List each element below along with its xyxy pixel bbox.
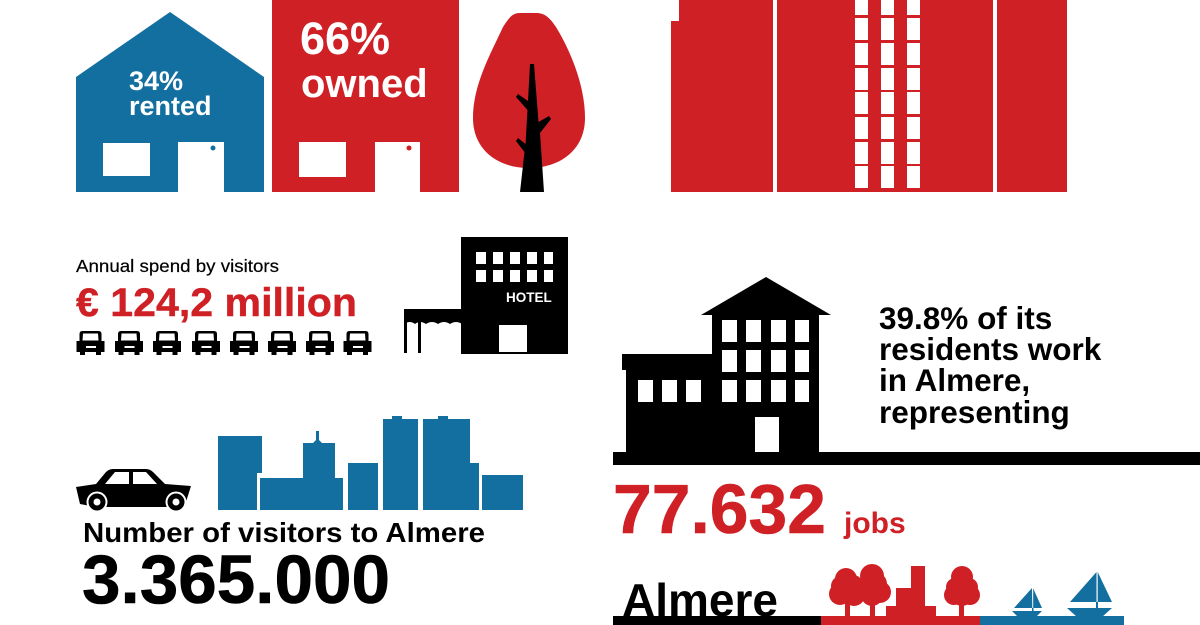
- owned door knob: [406, 146, 412, 150]
- red trees and building: [829, 564, 980, 617]
- row of car icons: [76, 331, 372, 355]
- house window: [103, 143, 150, 176]
- label: 66% owned: owned: [301, 62, 428, 106]
- label: 34% rented: rented: [129, 91, 212, 121]
- Almere label: Almere: [622, 574, 778, 625]
- hotel sign: HOTEL: [506, 290, 552, 305]
- figure: 77.632 jobs: jobs: [843, 507, 906, 540]
- text: number of visitors to Almere: Number of visitors to Almere: [83, 517, 485, 548]
- icon: office building: [622, 277, 831, 452]
- hotel awning: [404, 309, 462, 324]
- figure: € 124,2 million: € 124,2 million: [76, 281, 357, 325]
- blue skyline: [218, 416, 523, 510]
- text: annual spend by visitors: Annual spend by visitors: [76, 256, 279, 276]
- ground line: [613, 452, 1200, 465]
- door knob: [210, 146, 216, 150]
- label: 34% rented: 34%: [129, 66, 183, 96]
- text: residents work in Almere: 39.8% of its: [879, 300, 1052, 336]
- text: residents work in Almere: in Almere,: [879, 362, 1030, 398]
- house: 34% rented: [76, 12, 264, 192]
- windows: [855, 0, 920, 188]
- icon: red tree: [473, 13, 585, 192]
- house: 66% owned: [272, 0, 459, 192]
- red apartment buildings: [671, 0, 1067, 192]
- text: residents work in Almere: representing: [879, 394, 1070, 430]
- icon: hotel: [404, 237, 568, 354]
- figure: 3.365.000: 3.365.000: [82, 541, 390, 618]
- icon: black car: [76, 469, 191, 512]
- owned house window: [299, 142, 346, 177]
- label: 66% owned: 66%: [300, 13, 390, 64]
- blue sailboats: [1012, 572, 1112, 617]
- bottom strip: [613, 616, 1124, 625]
- figure: 77.632 jobs: 77.632: [613, 470, 826, 548]
- text: residents work in Almere: residents work: [879, 331, 1102, 367]
